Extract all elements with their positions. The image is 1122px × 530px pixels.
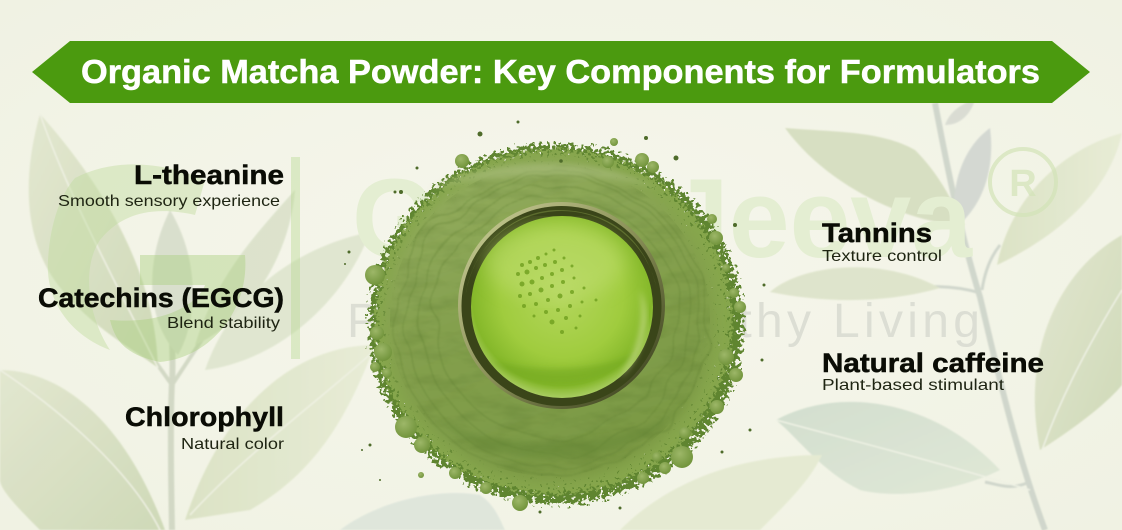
label: Chlorophyll: Natural color bbox=[181, 436, 285, 453]
label: Natural caffeine: Plant-based stimulant bbox=[822, 377, 1005, 394]
title: Organic Matcha Powder: Key Components for Formulators bbox=[81, 53, 1040, 90]
foam bubbles bbox=[516, 248, 598, 334]
watermark registered mark bbox=[990, 149, 1056, 215]
label: Tannins: Tannins bbox=[822, 218, 932, 248]
title banner bbox=[32, 41, 1090, 103]
watermark logo bbox=[48, 149, 1056, 362]
granular powder rim bbox=[376, 150, 732, 494]
label: Natural caffeine: Natural caffeine bbox=[822, 348, 1044, 378]
matcha powder mound with cup bbox=[344, 120, 766, 514]
granules bbox=[365, 138, 746, 511]
loose specks bbox=[344, 120, 766, 514]
label: Chlorophyll bbox=[125, 402, 285, 453]
watermark emblem bbox=[48, 157, 300, 362]
cup rim bbox=[458, 202, 665, 409]
watermark registered mark: R bbox=[1009, 163, 1037, 205]
label: L-theanine: Smooth sensory experience bbox=[58, 193, 280, 210]
label: L-theanine: L-theanine bbox=[134, 160, 284, 190]
label: Catechins: Blend stability bbox=[167, 315, 280, 332]
label: Catechins: Catechins (EGCG) bbox=[38, 283, 284, 313]
watermark tagline: Promoting Healthy Living bbox=[347, 295, 980, 348]
powder surface bbox=[386, 160, 714, 480]
label: Natural caffeine bbox=[822, 348, 1044, 394]
matcha liquid bbox=[471, 216, 653, 398]
watermark brand name: GreenJeeva bbox=[352, 156, 973, 281]
left botanical plant bbox=[0, 114, 505, 530]
label: Catechins bbox=[38, 283, 284, 332]
label: Tannins: Texture control bbox=[822, 248, 942, 265]
right botanical plant bbox=[620, 100, 1122, 530]
label: Chlorophyll: Chlorophyll bbox=[125, 402, 284, 432]
label: L-theanine bbox=[58, 160, 284, 210]
label: Tannins bbox=[822, 218, 942, 265]
scattered powder edge bbox=[369, 144, 743, 504]
